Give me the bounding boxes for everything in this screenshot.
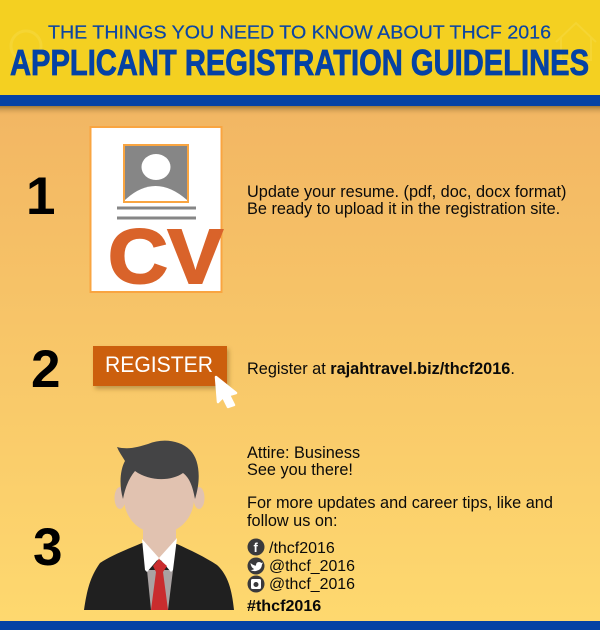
button: register: REGISTER: [105, 352, 213, 377]
number 2: 2: [31, 340, 60, 399]
step 1 text: [247, 183, 566, 218]
hashtag: #thcf2016: [247, 597, 321, 615]
step 1 text: Be ready to upload it in the registration site.: [247, 200, 560, 218]
number 1: 1: [26, 167, 55, 226]
number 3: 3: [33, 518, 62, 577]
social: facebook: [248, 538, 335, 557]
icon: CV document: [90, 127, 223, 300]
step 2 text: Register at rajahtravel.biz/thcf2016.: [247, 360, 515, 378]
illustration: businessman: [84, 441, 234, 610]
social: twitter: @thcf_2016: [269, 558, 355, 575]
step 3 text: For more updates and career tips, like and: [247, 494, 553, 512]
step 3 text: See you there!: [247, 461, 353, 479]
social: facebook: f: [254, 540, 258, 555]
icon: CV document: CV: [108, 214, 223, 300]
step 3 text: Attire: Business: [247, 444, 360, 462]
footer bar: [0, 621, 600, 630]
heading: subtitle: THE THINGS YOU NEED TO KNOW ABOUT THCF 2016: [48, 22, 551, 43]
icon: cursor: [216, 377, 236, 407]
step 3 text: follow us on:: [247, 512, 338, 530]
step 1 text: Update your resume. (pdf, doc, docx format): [247, 183, 566, 201]
step 3 text: [247, 444, 553, 530]
button: register: [93, 346, 227, 386]
social: instagram: @thcf_2016: [269, 576, 355, 593]
header banner: [0, 0, 600, 116]
social: facebook: /thcf2016: [269, 540, 335, 557]
